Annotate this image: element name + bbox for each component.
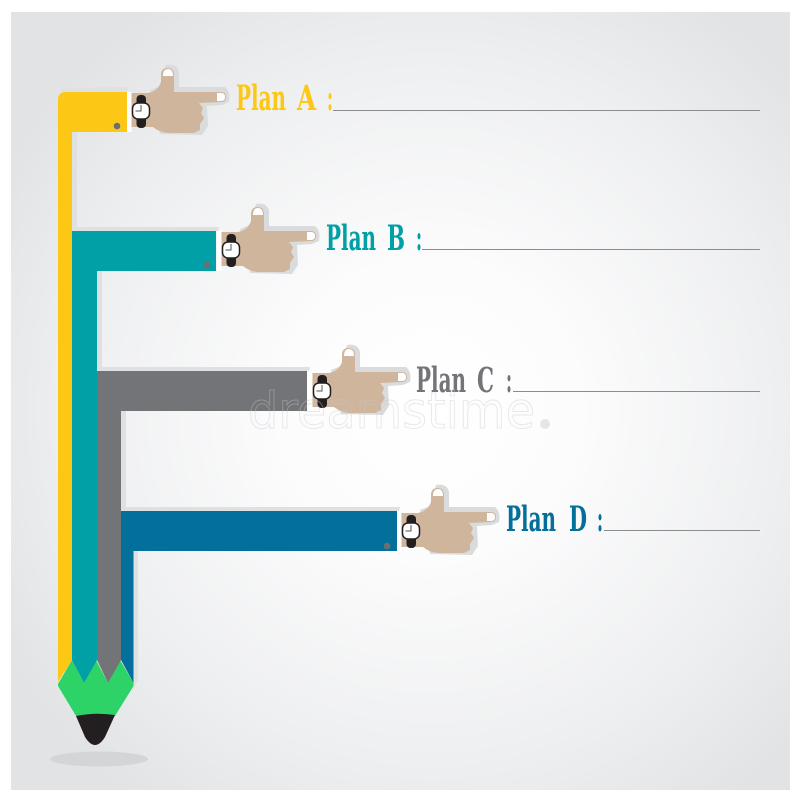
text: : [597,499,603,540]
pencil strip and arm: Plan D blue [121,511,397,683]
hand A [127,65,230,135]
text: : [327,78,333,119]
pencil shadow [50,752,148,766]
label: Plan A: A [296,78,317,119]
pencil strip and arm: Plan C gray [97,371,307,683]
cuff button D [384,543,390,549]
line A [333,110,760,111]
line B [422,249,760,250]
line C [513,391,760,392]
watermark: dreamstime [248,382,535,440]
pencil tip [76,714,115,745]
pencil strip and arm: Plan B teal [72,231,216,683]
hand C [308,345,410,415]
pencil arm shadows [62,87,400,690]
label: Plan B: Plan [326,218,376,259]
cuff button B [204,262,210,268]
label: Plan D: Plan [506,499,556,540]
cuff button A [114,123,120,129]
pencil: green wood [58,660,134,716]
line D [604,530,760,531]
text: : [506,360,512,401]
pencil strip and arm: Plan A yellow [58,92,127,682]
hand D [397,485,500,555]
hand B [217,204,320,274]
label: Plan B: B [387,218,405,259]
label: Plan A: Plan [236,78,286,119]
label: Plan C: Plan [416,360,466,401]
label: Plan D: D [569,499,587,540]
label: Plan C: C [477,360,494,401]
text: : [416,218,422,259]
